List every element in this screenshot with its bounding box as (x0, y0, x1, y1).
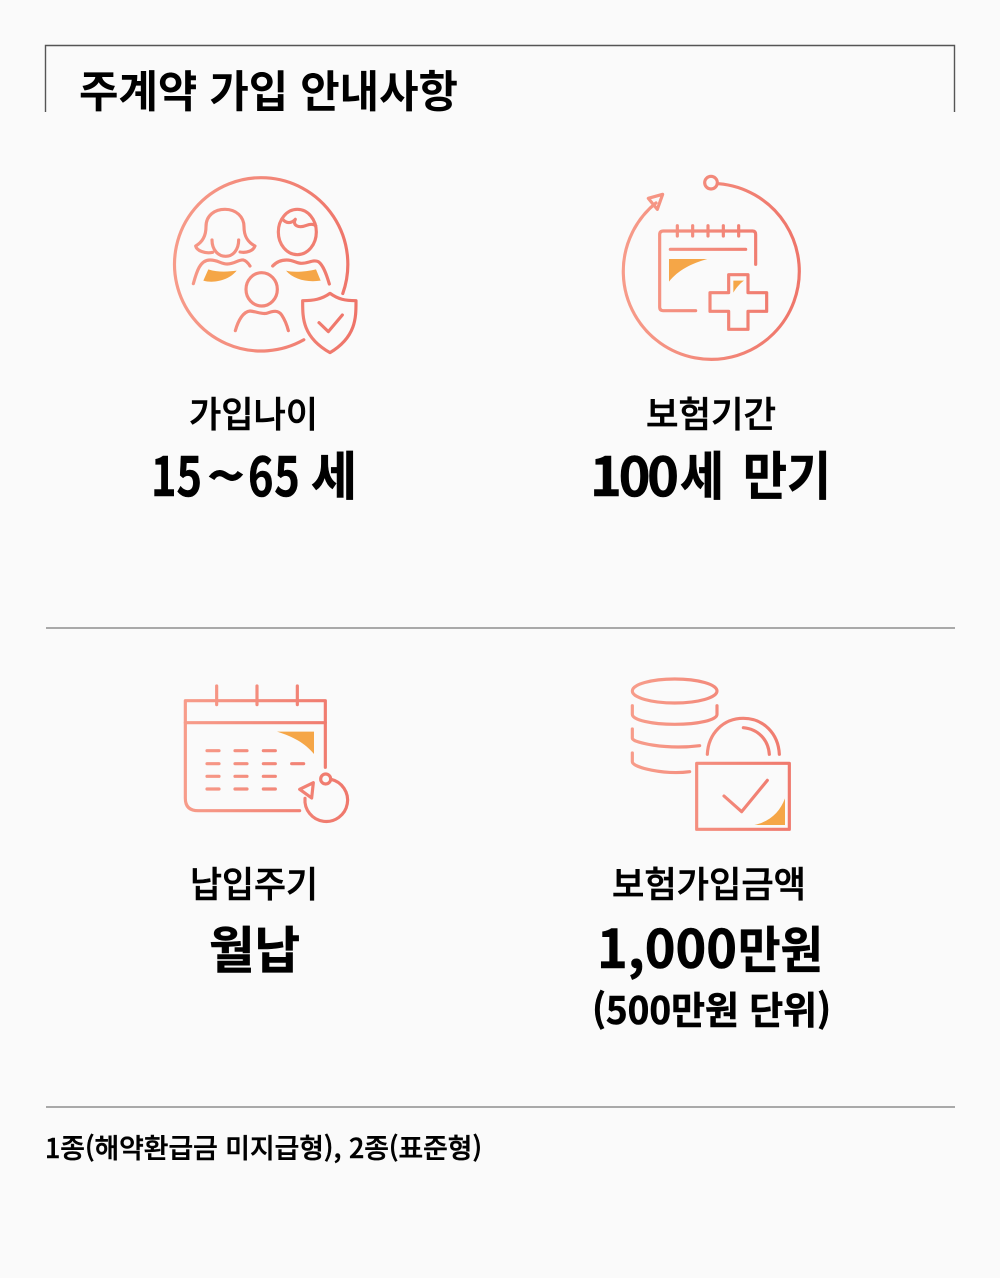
title frame (46, 46, 954, 112)
label: period: 보험기간 (646, 386, 776, 438)
value: period (590, 433, 831, 512)
value: age: 65 (248, 434, 301, 513)
value: coverage amount: 만원 (738, 911, 823, 983)
footnote: 1종(해약환급금 미지급형), 2종(표준형) (45, 1127, 482, 1166)
label: payment cycle: 납입주기 (190, 856, 318, 908)
label: coverage amount: 보험가입금액 (612, 856, 806, 908)
value: period: 100 (590, 433, 679, 512)
icon: family with shield (175, 178, 356, 353)
value: age: 세 (311, 435, 357, 510)
icon: payment calendar (185, 686, 348, 821)
icon: coins and lock (632, 679, 789, 829)
value: payment cycle: 월납 (209, 911, 300, 983)
value: age (151, 433, 357, 513)
value: period: 만기 (743, 435, 831, 510)
value: age: 15 (151, 434, 202, 513)
note: coverage unit: (500만원 단위) (592, 980, 831, 1035)
divider (46, 627, 955, 629)
icon: insurance period calendar with cross (623, 176, 799, 359)
value: coverage amount: 1,000 (597, 908, 737, 984)
label: age: 가입나이 (189, 386, 318, 438)
divider (46, 1106, 955, 1108)
title: 주계약 가입 안내사항 (79, 56, 458, 120)
value: period: 세 (680, 435, 724, 510)
value: age: ~ (207, 433, 245, 512)
value: coverage amount (597, 908, 823, 984)
